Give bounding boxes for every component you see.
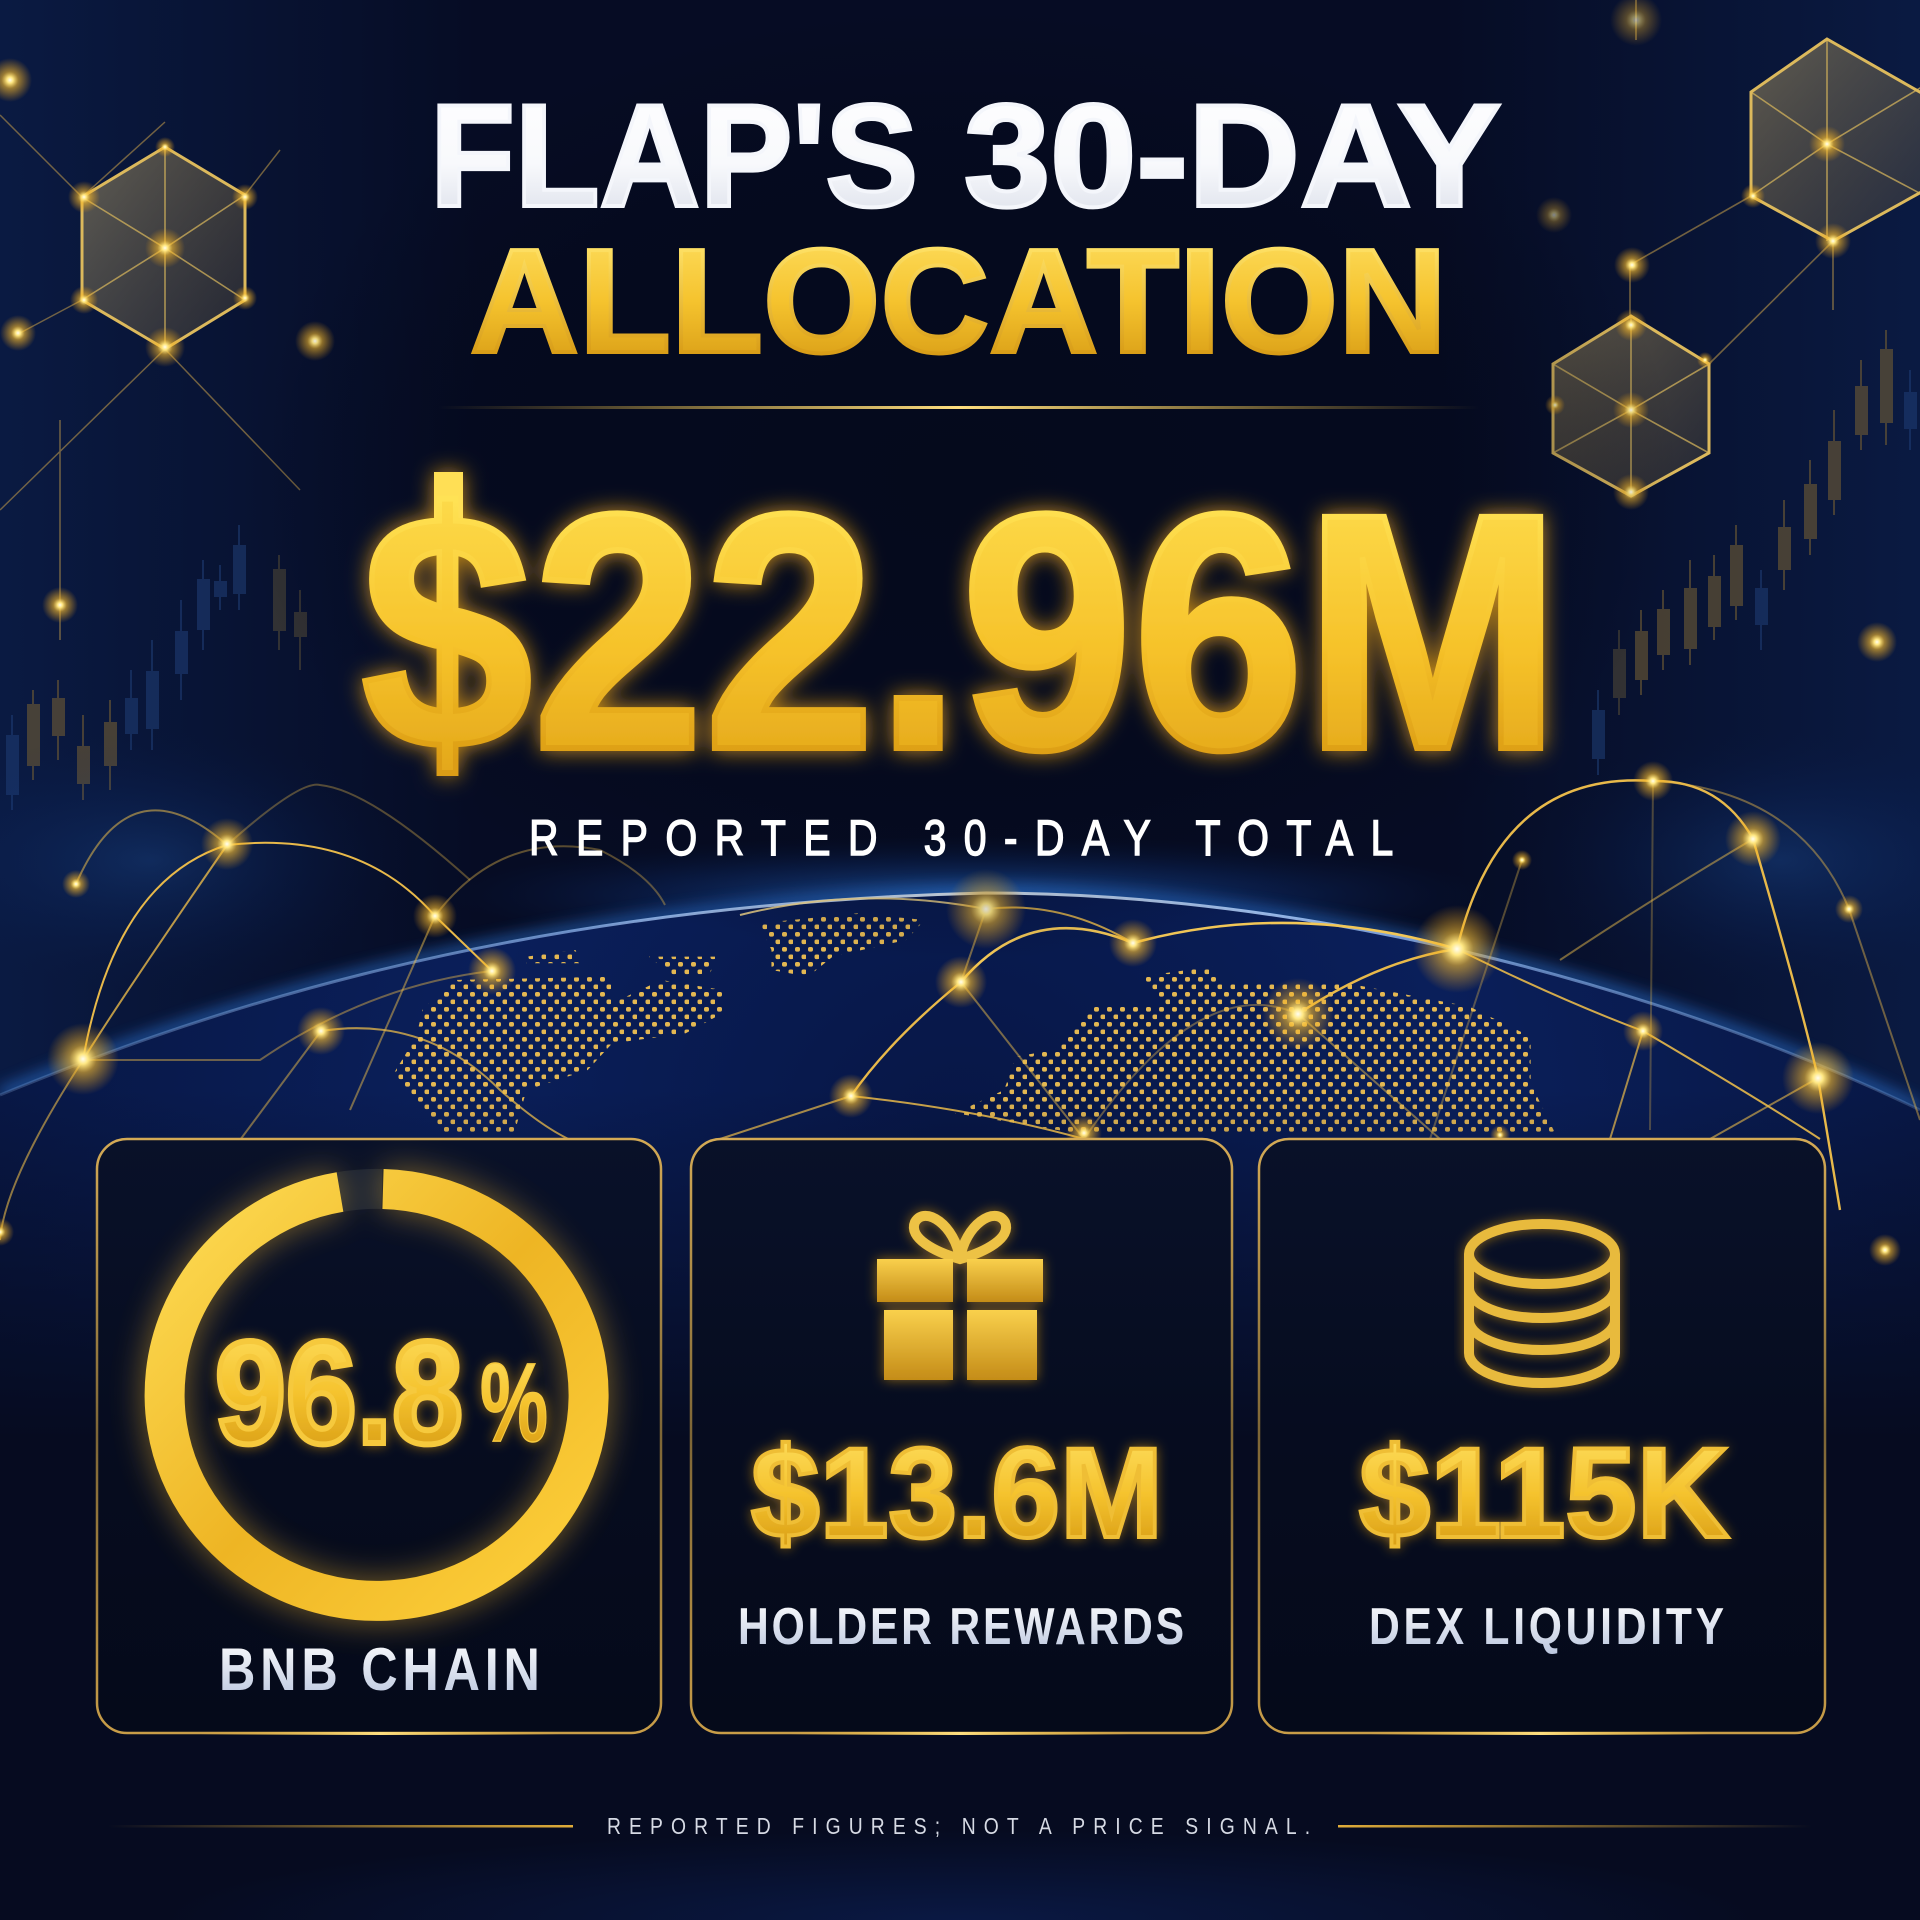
card value: $13.6M [751,1422,1163,1565]
icon: gift box [877,1216,1043,1380]
card base highlight [200,1732,560,1735]
headline caption: REPORTED 30-DAY TOTAL [529,810,1393,866]
icon: coin stack [1469,1224,1615,1383]
title line 2: ALLOCATION [470,219,1447,384]
footer note: REPORTED FIGURES; NOT A PRICE SIGNAL. [607,1815,1310,1839]
right candlestick chart [1592,330,1917,775]
globe fade to dark [0,1090,1920,1920]
card base highlight [1370,1732,1710,1735]
title line 1: FLAP'S [430,74,918,237]
title backdrop shading [240,0,1680,960]
title [430,74,1501,384]
network glowing nodes [0,761,1901,1266]
title line 1: 30-DAY [964,74,1501,237]
donut value: 96.8 [215,1311,463,1474]
card label: DEX LIQUIDITY [1369,1598,1724,1656]
icon: top right crystal cube [1536,0,1920,364]
blue swirl haze behind globe [0,730,1920,990]
title line 1 [430,74,1501,237]
card label: BNB CHAIN [219,1636,540,1703]
left candlestick chart [6,525,307,810]
lower blue tint [160,1830,1760,1920]
panel: BNB Chain [97,1139,661,1735]
headline value: $22.96M [361,445,1561,820]
donut chart 96.8% [165,1189,589,1601]
panel: holder rewards [691,1139,1232,1735]
donut value: % [480,1340,548,1465]
icon: left crystal cube [0,58,335,640]
network arcs [0,780,1920,1240]
card label: HOLDER REWARDS [738,1598,1184,1656]
card base highlight [790,1732,1130,1735]
icon: mid right crystal cube [1545,309,1897,662]
dotted continents [394,913,1554,1132]
panel: DEX liquidity [1259,1139,1825,1735]
card value: $115K [1359,1422,1729,1565]
title divider [438,406,1479,409]
globe [0,880,1920,1920]
